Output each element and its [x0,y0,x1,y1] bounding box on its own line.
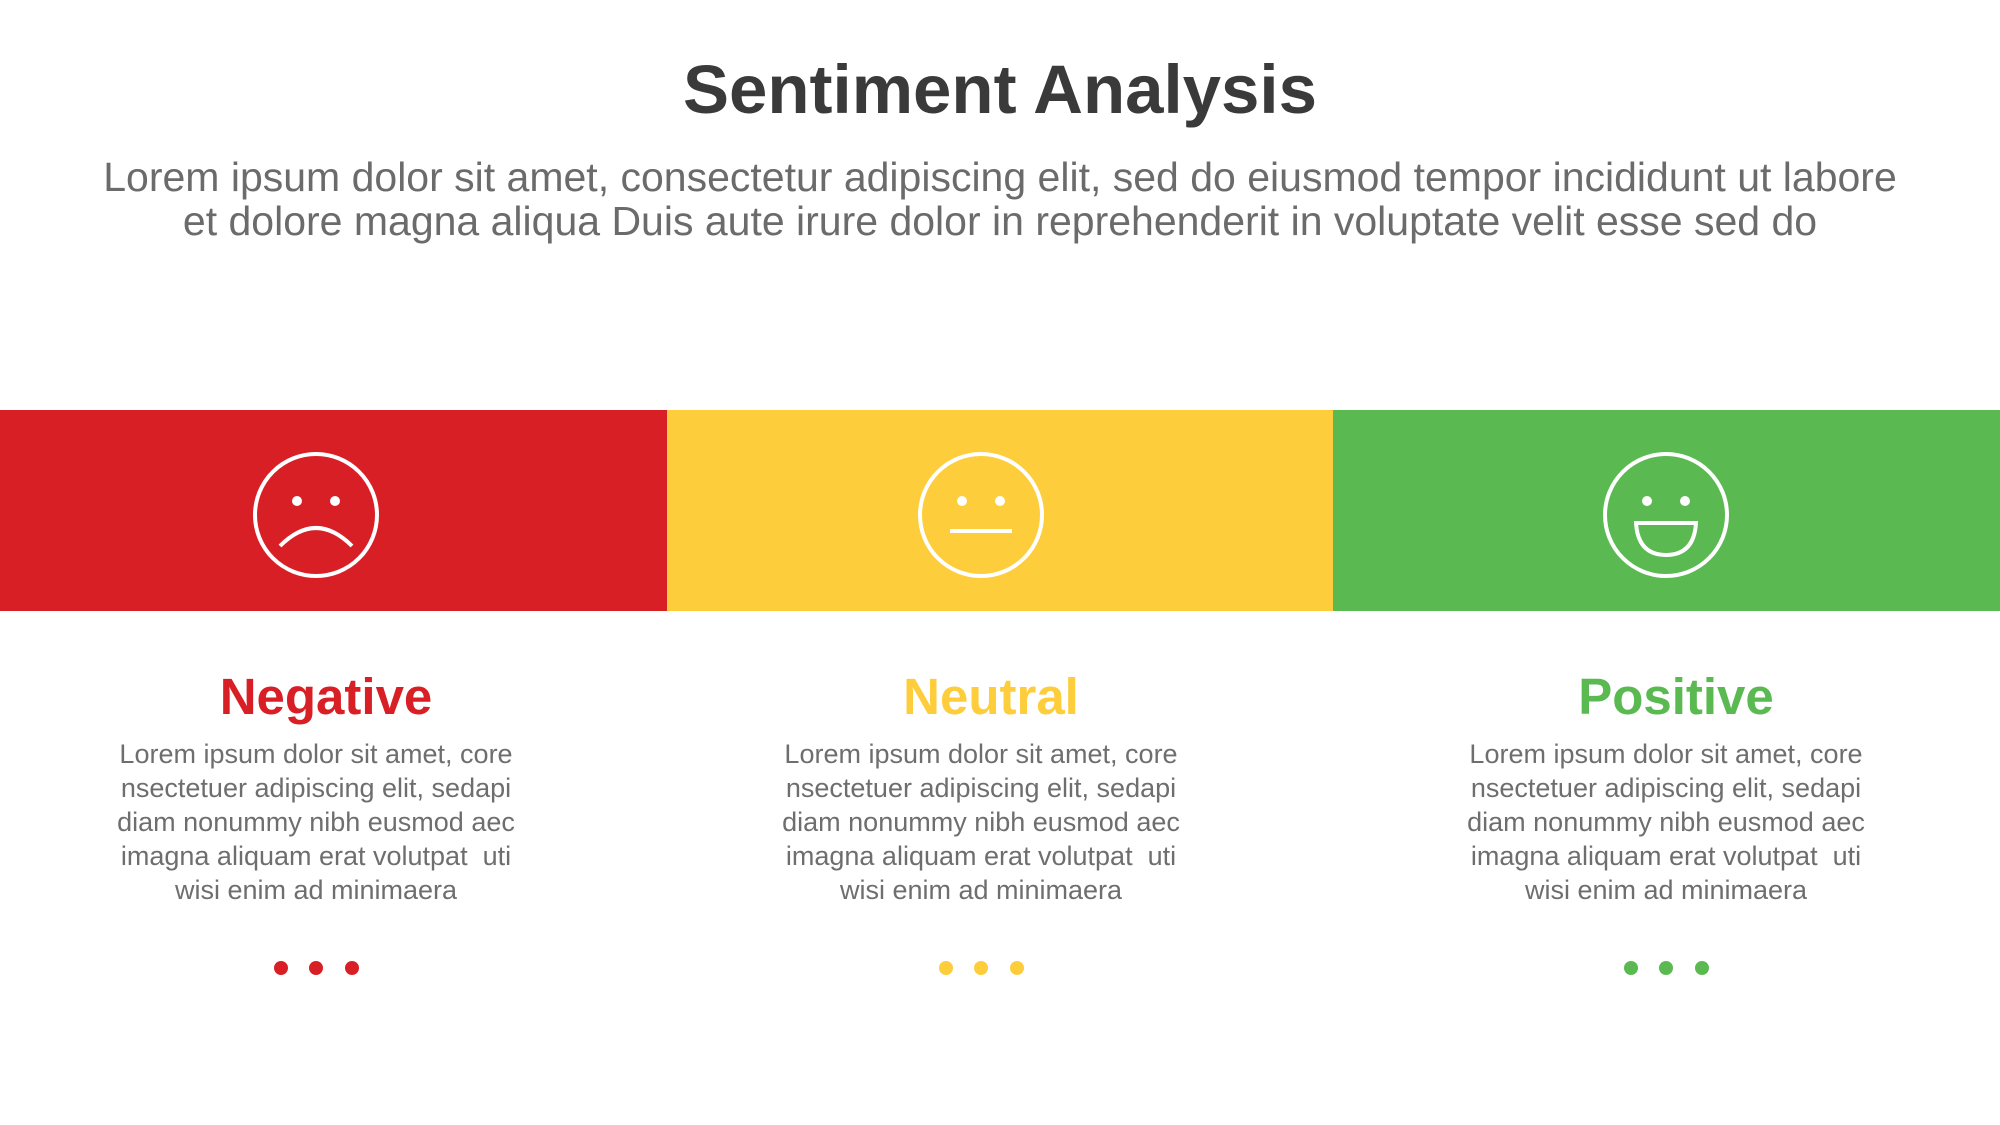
text: neutral: Lorem ipsum dolor sit amet, core [784,739,1178,769]
text: neutral: wisi enim ad minimaera [840,875,1122,905]
text: neutral: nsectetuer adipiscing elit, sedapi [786,773,1176,803]
icon: happy face [1605,454,1727,576]
heading: positive: Positive [1578,668,1774,725]
text: negative: Lorem ipsum dolor sit amet, core [119,739,513,769]
band: positive [1333,410,2000,611]
text: positive: imagna aliquam erat volutpat uti [1471,841,1861,871]
icon: sad face [255,454,377,576]
text: positive: wisi enim ad minimaera [1525,875,1807,905]
text: negative: wisi enim ad minimaera [175,875,457,905]
text: neutral: imagna aliquam erat volutpat uti [786,841,1176,871]
dots: positive [1624,961,1709,975]
band: neutral [667,410,1333,611]
text: positive [1467,739,1865,905]
text: negative [117,739,515,905]
sentiment band [0,410,2000,611]
icon: neutral face [920,454,1042,576]
text: neutral: diam nonummy nibh eusmod aec [782,807,1180,837]
text: neutral [782,739,1180,905]
heading: neutral: Neutral [903,668,1079,725]
band: negative [0,410,667,611]
text: positive: nsectetuer adipiscing elit, sedapi [1471,773,1861,803]
subtitle: et dolore magna aliqua Duis aute irure dolor in reprehenderit in voluptate velit esse sed do [183,198,1817,244]
dots: negative [274,961,359,975]
text: positive: Lorem ipsum dolor sit amet, core [1469,739,1863,769]
text: negative: imagna aliquam erat volutpat uti [121,841,511,871]
title: Sentiment Analysis [683,51,1317,128]
dots: neutral [939,961,1024,975]
subtitle [103,154,1897,244]
text: negative: nsectetuer adipiscing elit, sedapi [121,773,511,803]
heading: negative: Negative [220,668,432,725]
text: positive: diam nonummy nibh eusmod aec [1467,807,1865,837]
text: negative: diam nonummy nibh eusmod aec [117,807,515,837]
subtitle: Lorem ipsum dolor sit amet, consectetur adipiscing elit, sed do eiusmod tempor incididunt ut labore [103,154,1897,200]
